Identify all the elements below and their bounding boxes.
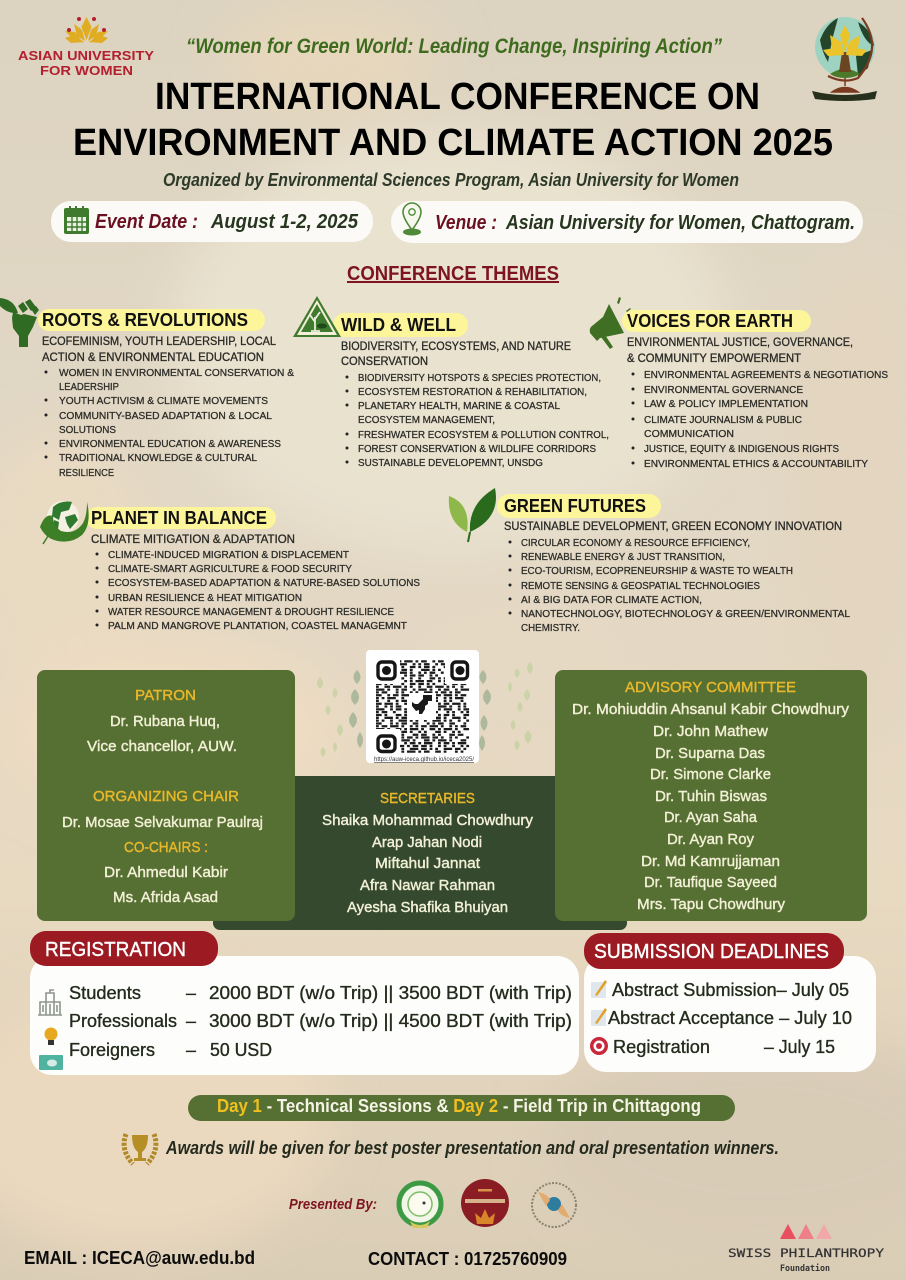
theme: wild and well: BIODIVERSITY, ECOSYSTEMS, AND NATURE — [341, 341, 571, 353]
panel: advisory committee: Dr. Taufique Sayeed — [644, 874, 777, 891]
event date pill: Event Date : — [95, 211, 198, 233]
panel: secretaries: Miftahul Jannat — [375, 855, 481, 872]
panel: secretaries — [213, 776, 627, 930]
topic list: REMOTE SENSING & GEOSPATIAL TECHNOLOGIES — [521, 580, 760, 592]
theme: voices for earth: & COMMUNITY EMPOWERMENT — [627, 353, 801, 365]
panel: registration — [30, 931, 579, 1075]
topic list: ECO-TOURISM, ECOPRENEURSHIP & WASTE TO WEALTH — [521, 565, 793, 577]
event date pill: August 1-2, 2025 — [210, 211, 359, 233]
QR code: https://auw-iceca.github.io/iceca2025/ — [374, 757, 474, 763]
theme: voices for earth: VOICES FOR EARTH — [627, 311, 793, 331]
panel: secretaries: Ayesha Shafika Bhuiyan — [347, 899, 508, 916]
theme: roots and revolutions: ROOTS & REVOLUTIONS — [42, 310, 248, 330]
contact number: CONTACT : 01725760909 — [368, 1248, 567, 1269]
panel: submission deadlines: – July 15 — [764, 1037, 835, 1057]
topic list: RESILIENCE — [59, 467, 114, 479]
panel: patron and chairs: ORGANIZING CHAIR — [93, 788, 239, 805]
topic list: RENEWABLE ENERGY & JUST TRANSITION, — [521, 551, 725, 563]
logo: Swiss Philanthropy Foundation — [728, 1224, 884, 1274]
theme: voices for earth — [590, 297, 888, 470]
panel: submission deadlines: Abstract Acceptance – July 10 — [608, 1008, 852, 1028]
topic list: WATER RESOURCE MANAGEMENT & DROUGHT RESILIENCE — [108, 606, 394, 618]
panel: advisory committee: Dr. Ayan Saha — [664, 809, 758, 826]
topic list: PLANETARY HEALTH, MARINE & COASTAL — [358, 400, 560, 412]
icon: target — [590, 1037, 608, 1055]
topic list: ECOSYSTEM MANAGEMENT, — [358, 414, 495, 426]
topic list: ECOSYSTEM RESTORATION & REHABILITATION, — [358, 386, 587, 398]
panel: patron and chairs: Dr. Mosae Selvakumar Paulraj — [62, 814, 263, 831]
schedule bar: Day 1 - Technical Sessions & Day 2 - Field Trip in Chittagong — [217, 1096, 701, 1116]
topic list: CLIMATE-SMART AGRICULTURE & FOOD SECURITY — [108, 563, 352, 575]
theme: planet in balance — [40, 501, 420, 632]
panel: submission deadlines: SUBMISSION DEADLINES — [594, 941, 829, 963]
logo: student government — [461, 1179, 509, 1227]
topic list — [96, 549, 420, 632]
panel: registration: – — [186, 1040, 196, 1060]
icon: building — [38, 990, 62, 1015]
logo: environmental sciences globe — [812, 17, 877, 101]
panel: advisory committee: Dr. Suparna Das — [655, 745, 765, 762]
decorative leaves around the QR code — [317, 662, 533, 757]
theme: wild and well: CONSERVATION — [341, 356, 428, 368]
panel: secretaries: Afra Nawar Rahman — [360, 877, 495, 894]
logo: Asian University for Women: FOR WOMEN — [40, 63, 133, 78]
icon: memo — [591, 1008, 607, 1026]
topic list: CLIMATE JOURNALISM & PUBLIC — [644, 414, 802, 426]
theme: voices for earth: ENVIRONMENTAL JUSTICE, GOVERNANCE, — [627, 337, 853, 349]
panel: patron and chairs: Vice chancellor, AUW. — [87, 738, 237, 755]
topic list: SUSTAINABLE DEVELOPEMNT, UNSDG — [358, 457, 543, 469]
panel: patron and chairs — [37, 670, 295, 921]
topic list: CIRCULAR ECONOMY & RESOURCE EFFICIENCY, — [521, 537, 750, 549]
topic list: AI & BIG DATA FOR CLIMATE ACTION, — [521, 594, 702, 606]
logo: Asian University for Women: ASIAN UNIVERSITY — [18, 48, 154, 63]
topic list: COMMUNICATION — [644, 428, 734, 440]
icon: megaphone — [590, 297, 631, 349]
panel: advisory committee: Dr. John Mathew — [653, 723, 768, 740]
panel: registration: – — [186, 983, 196, 1003]
panel: registration: – — [186, 1011, 196, 1031]
panel: patron and chairs: PATRON — [135, 687, 196, 704]
panel: patron and chairs: Dr. Ahmedul Kabir — [104, 864, 228, 881]
logo: Swiss Philanthropy Foundation: SWISS PHILANTHROPY — [728, 1246, 884, 1260]
theme: wild and well — [293, 296, 609, 469]
organizer line: Organized by Environmental Sciences Program, Asian University for Women — [163, 170, 739, 190]
theme: green futures: SUSTAINABLE DEVELOPMENT, GREEN ECONOMY INNOVATION — [504, 521, 842, 533]
topic list: SOLUTIONS — [59, 424, 116, 436]
icon: memo — [591, 980, 607, 998]
topic list — [44, 367, 294, 479]
topic list: YOUTH ACTIVISM & CLIMATE MOVEMENTS — [59, 395, 268, 407]
logo: Swiss Philanthropy Foundation: Foundation — [780, 1263, 830, 1274]
icon: raised fist with leaf — [0, 298, 39, 347]
panel: advisory committee: Dr. Md Kamrujjaman — [641, 853, 780, 870]
topic list — [632, 369, 888, 470]
panel: advisory committee: Dr. Tuhin Biswas — [655, 788, 767, 805]
main title — [73, 76, 833, 164]
topic list — [346, 372, 609, 469]
theme: green futures: GREEN FUTURES — [504, 496, 646, 516]
topic list: JUSTICE, EQUITY & INDIGENOUS RIGHTS — [644, 443, 839, 455]
topic list — [508, 537, 850, 634]
email: EMAIL : ICECA@auw.edu.bd — [24, 1247, 255, 1268]
topic list: BIODIVERSITY HOTSPOTS & SPECIES PROTECTION, — [358, 372, 601, 384]
venue pill: Asian University for Women, Chattogram. — [505, 212, 855, 234]
icon: banknote — [39, 1055, 63, 1070]
icon: two green leaves — [449, 488, 496, 542]
logo: green club — [399, 1183, 441, 1228]
panel: registration: Professionals — [69, 1011, 177, 1031]
topic list: WOMEN IN ENVIRONMENTAL CONSERVATION & — [59, 367, 294, 379]
tagline: “Women for Green World: Leading Change, Inspiring Action” — [186, 35, 722, 58]
main title: INTERNATIONAL CONFERENCE ON — [155, 76, 760, 118]
icon: calendar — [64, 206, 89, 234]
topic list: FOREST CONSERVATION & WILDLIFE CORRIDORS — [358, 443, 596, 455]
topic list: FRESHWATER ECOSYSTEM & POLLUTION CONTROL, — [358, 429, 609, 441]
theme: planet in balance: CLIMATE MITIGATION & ADAPTATION — [91, 534, 295, 546]
panel: registration: 2000 BDT (w/o Trip) || 3500 BDT (with Trip) — [209, 983, 572, 1003]
topic list: PALM AND MANGROVE PLANTATION, COASTEL MANAGEMNT — [108, 620, 408, 632]
icon: light bulb — [44, 1028, 58, 1045]
presented by label: Presented By: — [289, 1196, 377, 1213]
panel: advisory committee: Dr. Simone Clarke — [650, 766, 771, 783]
theme: planet in balance: PLANET IN BALANCE — [91, 508, 267, 528]
topic list: LAW & POLICY IMPLEMENTATION — [644, 398, 808, 410]
topic list: CLIMATE-INDUCED MIGRATION & DISPLACEMENT — [108, 549, 350, 561]
topic list: ENVIRONMENTAL ETHICS & ACCOUNTABILITY — [644, 458, 868, 470]
theme: roots and revolutions: ACTION & ENVIRONMENTAL EDUCATION — [42, 352, 264, 364]
icon: trophy with laurel — [124, 1134, 156, 1164]
QR code — [366, 650, 479, 763]
logo: environmental network — [532, 1183, 576, 1227]
awards note: Awards will be given for best poster presentation and oral presentation winners. — [165, 1138, 779, 1158]
panel: submission deadlines: Registration — [613, 1037, 710, 1057]
topic list: CHEMISTRY. — [521, 622, 580, 634]
venue pill: Venue : — [435, 212, 497, 234]
theme: roots and revolutions — [0, 298, 294, 479]
topic list: COMMUNITY-BASED ADAPTATION & LOCAL — [59, 410, 272, 422]
panel: advisory committee: Dr. Mohiuddin Ahsanul Kabir Chowdhury — [572, 701, 850, 718]
topic list: ENVIRONMENTAL EDUCATION & AWARENESS — [59, 438, 281, 450]
panel: registration: REGISTRATION — [45, 939, 186, 961]
panel: registration: Students — [69, 983, 141, 1003]
topic list: ENVIRONMENTAL AGREEMENTS & NEGOTIATIONS — [644, 369, 888, 381]
topic list: NANOTECHNOLOGY, BIOTECHNOLOGY & GREEN/ENVIRONMENTAL — [521, 608, 850, 620]
panel: advisory committee: Mrs. Tapu Chowdhury — [637, 896, 786, 913]
panel: advisory committee — [555, 670, 867, 921]
panel: secretaries: Arap Jahan Nodi — [372, 834, 482, 851]
theme: green futures — [449, 488, 850, 634]
logo: Asian University for Women — [18, 17, 154, 78]
icon: map pin — [403, 203, 421, 236]
icon: globe with leaf — [40, 501, 89, 544]
panel: secretaries: Shaika Mohammad Chowdhury — [322, 812, 533, 829]
panel: secretaries: SECRETARIES — [380, 790, 475, 807]
panel: advisory committee: ADVISORY COMMITTEE — [625, 679, 796, 696]
panel: patron and chairs: Dr. Rubana Huq, — [110, 713, 220, 730]
panel: submission deadlines — [584, 933, 876, 1072]
panel: patron and chairs: Ms. Afrida Asad — [113, 889, 218, 906]
topic list: LEADERSHIP — [59, 381, 119, 393]
panel: advisory committee: Dr. Ayan Roy — [667, 831, 754, 848]
section heading: conference themes: CONFERENCE THEMES — [347, 263, 559, 285]
panel: registration: Foreigners — [69, 1040, 155, 1060]
topic list: ECOSYSTEM-BASED ADAPTATION & NATURE-BASED SOLUTIONS — [108, 577, 420, 589]
panel: submission deadlines: Abstract Submission– July 05 — [612, 980, 849, 1000]
panel: registration: 3000 BDT (w/o Trip) || 4500 BDT (with Trip) — [209, 1011, 572, 1031]
topic list: ENVIRONMENTAL GOVERNANCE — [644, 384, 803, 396]
panel: registration: 50 USD — [210, 1040, 272, 1060]
theme: roots and revolutions: ECOFEMINISM, YOUTH LEADERSHIP, LOCAL — [42, 336, 277, 348]
topic list: URBAN RESILIENCE & HEAT MITIGATION — [108, 592, 302, 604]
topic list: TRADITIONAL KNOWLEDGE & CULTURAL — [59, 452, 257, 464]
icon: warning triangle with tree — [293, 296, 341, 337]
main title: ENVIRONMENT AND CLIMATE ACTION 2025 — [73, 122, 833, 164]
panel: patron and chairs: CO-CHAIRS : — [124, 839, 208, 856]
event date pill — [51, 201, 373, 242]
venue pill — [391, 201, 863, 243]
theme: wild and well: WILD & WELL — [341, 315, 456, 335]
